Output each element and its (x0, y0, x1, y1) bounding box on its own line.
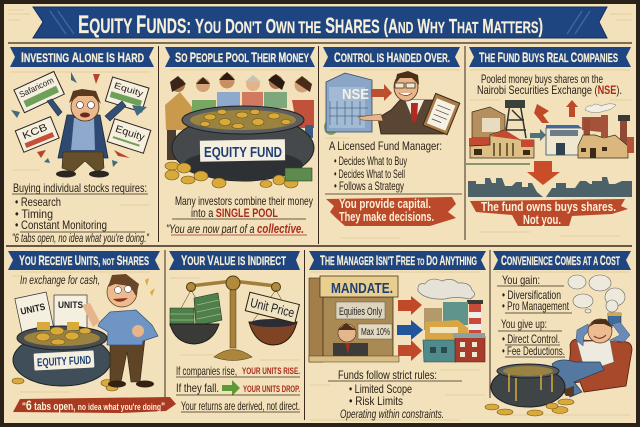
text: pooled money (477, 72, 622, 97)
unit price sign: Unit Price (249, 295, 296, 320)
callout: you provide capital: They make decisions. (339, 210, 434, 224)
heading: YOU RECEIVE UNITS, NOT SHARES (19, 252, 149, 268)
text: if companies rise (176, 364, 300, 413)
text: if companies rise: If they fall. (176, 381, 219, 395)
panel: you receive units (8, 251, 176, 413)
callout: you provide capital: You provide capital. (339, 197, 431, 211)
heading: INVESTING ALONE IS HARD (21, 49, 144, 65)
text: gain and give up (497, 273, 572, 358)
panel: manager isn't free (309, 251, 486, 421)
callout: the fund owns buys shares (470, 199, 628, 227)
illustration: relaxed man, smoke and leaking pot (485, 275, 632, 416)
illustration: stressed investor with stock cards: Equity (113, 80, 145, 99)
text: requirements: • Research (15, 195, 61, 209)
text: licensed fund manager: • Follows a Strategy (334, 179, 404, 193)
illustration: stressed investor with stock cards: Equity (114, 124, 146, 143)
illustration: mandate booth: Equities Only (339, 306, 382, 318)
arrows to companies (397, 296, 423, 361)
panel: the fund buys real companies (466, 47, 634, 227)
panel: control is handed over (323, 47, 462, 226)
illustration: pot, unit documents and man: UNITS (58, 300, 83, 311)
text: single pool: "You are now part of a collective. (166, 221, 304, 236)
text: licensed fund manager (325, 139, 462, 194)
text: single pool (166, 194, 313, 236)
text: single pool: Many investors combine their money (175, 194, 313, 208)
text: gain and give up: You give up: (501, 317, 547, 331)
illustration: pot, unit documents and man (12, 274, 158, 391)
illustration: pot, unit documents and man: UNITS (20, 302, 46, 318)
text: funds follow strict rules: Operating within constraints. (340, 407, 444, 421)
text: gain and give up: • Pro Management (502, 299, 569, 313)
text: licensed fund manager: • Decides What to Buy (334, 154, 407, 168)
title banner (33, 7, 607, 39)
illustration: mandate booth: MANDATE. (331, 280, 393, 297)
pot label: EQUITY FUND (204, 144, 282, 161)
text: if companies rise: Your returns are derived, not direct. (181, 399, 300, 413)
text: gain and give up: • Fee Deductions. (502, 344, 565, 358)
heading: THE MANAGER ISN'T FREE TO DO ANYTHING (320, 252, 477, 268)
panel: your value is indirect (169, 251, 300, 413)
illustration: mandate booth: Max 10% (361, 327, 390, 338)
text: if companies rise: YOUR UNITS RISE. (242, 366, 300, 376)
text: gain and give up: • Direct Control. (502, 332, 560, 346)
text: gain and give up: You gain: (502, 273, 540, 287)
illustration: NSE building and fund manager (324, 71, 460, 135)
illustration: companies and arrows (466, 100, 634, 197)
text: in exchange: In exchange for cash, (20, 273, 100, 287)
text: funds follow strict rules: • Risk Limits (349, 394, 403, 408)
illustration: stressed investor with stock cards: KCB (21, 122, 50, 142)
panel: convenience comes at a cost (485, 251, 632, 416)
text: pooled money: Nairobi Securities Exchange (NSE). (477, 83, 622, 97)
panel: so people pool their money (165, 47, 315, 236)
pot label (200, 139, 285, 162)
heading: CONVENIENCE COMES AT A COST (501, 252, 620, 268)
text: requirements: Buying individual stocks requires: (13, 181, 147, 195)
heading: SO PEOPLE POOL THEIR MONEY (175, 49, 309, 65)
text: funds follow strict rules (328, 368, 462, 421)
text: funds follow strict rules: • Limited Scope (349, 382, 412, 396)
illustration: mandate booth (309, 276, 399, 362)
callout: you provide capital (326, 197, 456, 226)
pot label (34, 350, 94, 371)
illustration: stressed investor with stock cards: Safaricom (17, 75, 55, 100)
illustration: smoky city (418, 279, 485, 362)
text: single pool: into a SINGLE POOL (191, 206, 278, 220)
heading: YOUR VALUE IS INDIRECT (181, 252, 286, 268)
NSE sign: NSE (342, 86, 369, 103)
text: if companies rise: If companies rise, (176, 364, 237, 378)
text: gain and give up: • Diversification (502, 288, 561, 302)
text: funds follow strict rules: Funds follow strict rules: (338, 368, 437, 382)
text: requirements (12, 181, 149, 245)
text: requirements: • Timing (15, 207, 53, 221)
text: requirements: • Constant Monitoring (15, 218, 107, 232)
panel: investing alone is hard (10, 47, 154, 245)
callout: the fund owns buys shares: Not you. (523, 213, 561, 227)
text: licensed fund manager: • Decides What to Sell (334, 167, 405, 181)
heading: THE FUND BUYS REAL COMPANIES (479, 49, 618, 65)
illustration: balance scale (170, 276, 299, 360)
callout: 6 tabs open: "6 tabs open, no idea what you're doing" (22, 397, 165, 413)
heading: CONTROL IS HANDED OVER. (334, 49, 450, 65)
illustration: people around pot of coins (165, 72, 314, 188)
text: requirements: "6 tabs open, no idea what you're doing." (12, 231, 149, 245)
text: licensed fund manager: A Licensed Fund Manager: (329, 139, 442, 153)
pot label: EQUITY FUND (37, 355, 91, 369)
illustration: stressed investor with stock cards (11, 71, 151, 178)
text: if companies rise: YOUR UNITS DROP. (243, 384, 300, 394)
title text: EQUITY FUNDS: YOU DON'T OWN THE SHARES (AND WHY THAT MATTERS) (78, 11, 543, 39)
